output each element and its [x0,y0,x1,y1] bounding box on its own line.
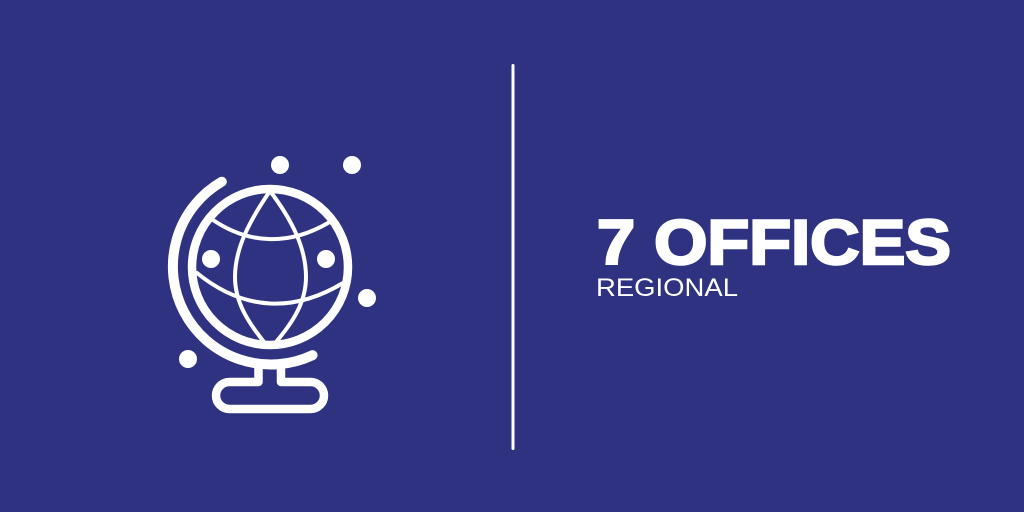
globe stand base [216,367,324,409]
icon: desk globe [173,182,348,409]
globe meridians [235,191,306,342]
decorative dots [179,156,376,368]
vertical divider [512,64,514,450]
globe arm [173,182,313,365]
subheading: regional: REGIONAL [596,274,738,302]
globe upper latitude [213,220,328,239]
globe lower latitude [197,273,343,304]
heading: 7 offices: 7 OFFICES [597,208,951,278]
globe outline [192,189,348,345]
